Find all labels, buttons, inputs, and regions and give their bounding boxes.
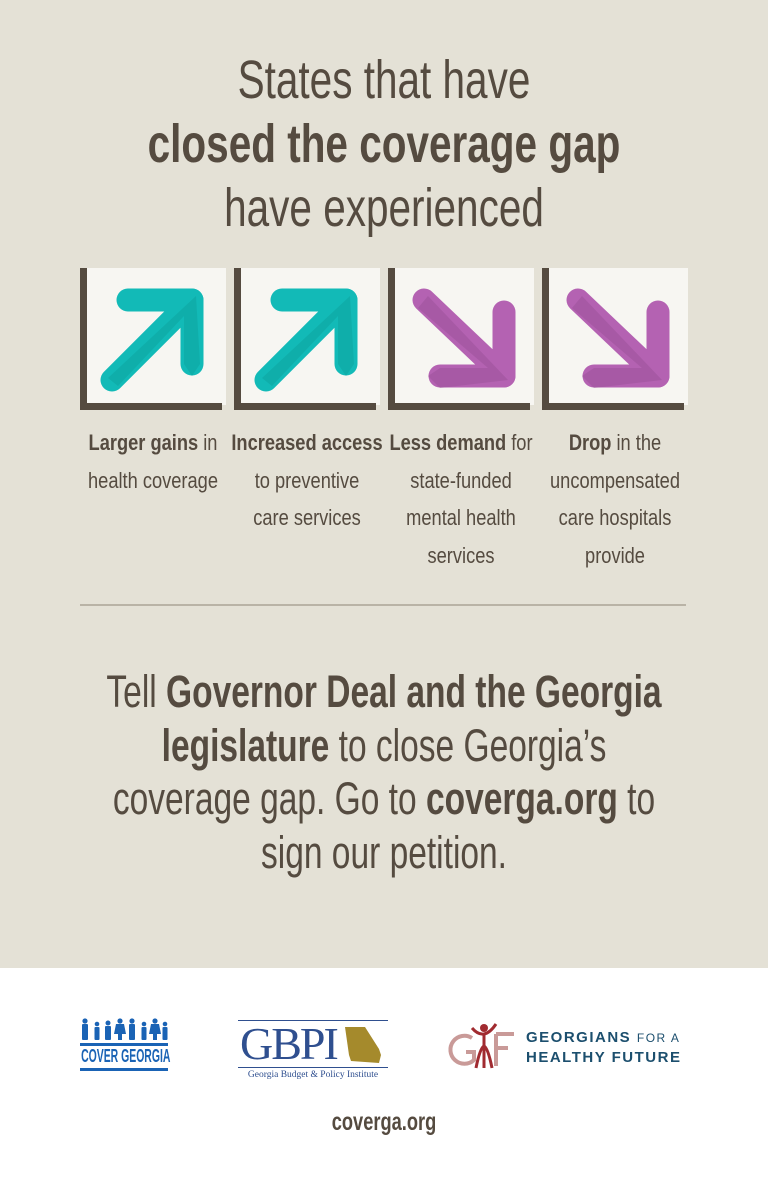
logo: GBPI (238, 1018, 388, 1080)
logo: cover georgia (80, 1018, 170, 1071)
call to action (106, 666, 662, 878)
label 1: health coverage (88, 468, 218, 492)
title (148, 50, 620, 238)
label 2: to preventive (255, 468, 359, 492)
label 1: Larger gains in (89, 430, 217, 455)
call to action: Tell Governor Deal and the Georgia (106, 666, 662, 717)
label 4: uncompensated (550, 468, 680, 492)
icon: up arrow 2 (234, 268, 380, 410)
label 3: state-funded (410, 468, 512, 492)
label 4 (550, 430, 680, 568)
logo: cover georgia: COVER GEORGIA (81, 1046, 170, 1066)
title: States that have (238, 50, 530, 110)
logo: Georgians for a Healthy Future (448, 1023, 681, 1068)
logo: Georgians for a Healthy Future: HEALTHY FUTURE (526, 1049, 681, 1066)
label 1 (88, 430, 218, 492)
label 3 (389, 430, 533, 568)
title: closed the coverage gap (148, 114, 620, 174)
footer url: coverga.org (332, 1108, 436, 1136)
icon: down arrow 2 (542, 268, 688, 410)
title: have experienced (224, 178, 544, 238)
label 2 (231, 430, 383, 530)
label 2: Increased access (231, 430, 383, 455)
label 4: Drop in the (569, 430, 661, 455)
icon: up arrow 1 (80, 268, 226, 410)
call to action: sign our petition. (261, 826, 507, 878)
label 4: care hospitals (559, 505, 671, 530)
call to action: coverage gap. Go to coverga.org to (113, 773, 655, 824)
logo: Georgians for a Healthy Future: GEORGIANS FOR A (526, 1029, 680, 1046)
label 2: care services (253, 505, 361, 530)
logo: GBPI: Georgia Budget & Policy Institute (248, 1070, 378, 1080)
label 4: provide (585, 542, 645, 568)
label 3: mental health (406, 505, 516, 530)
logo: GBPI: GBPI (240, 1018, 337, 1069)
label 3: Less demand for (389, 430, 533, 455)
icon: down arrow 1 (388, 268, 534, 410)
label 3: services (428, 542, 494, 568)
call to action: legislature to close Georgia’s (162, 720, 606, 770)
